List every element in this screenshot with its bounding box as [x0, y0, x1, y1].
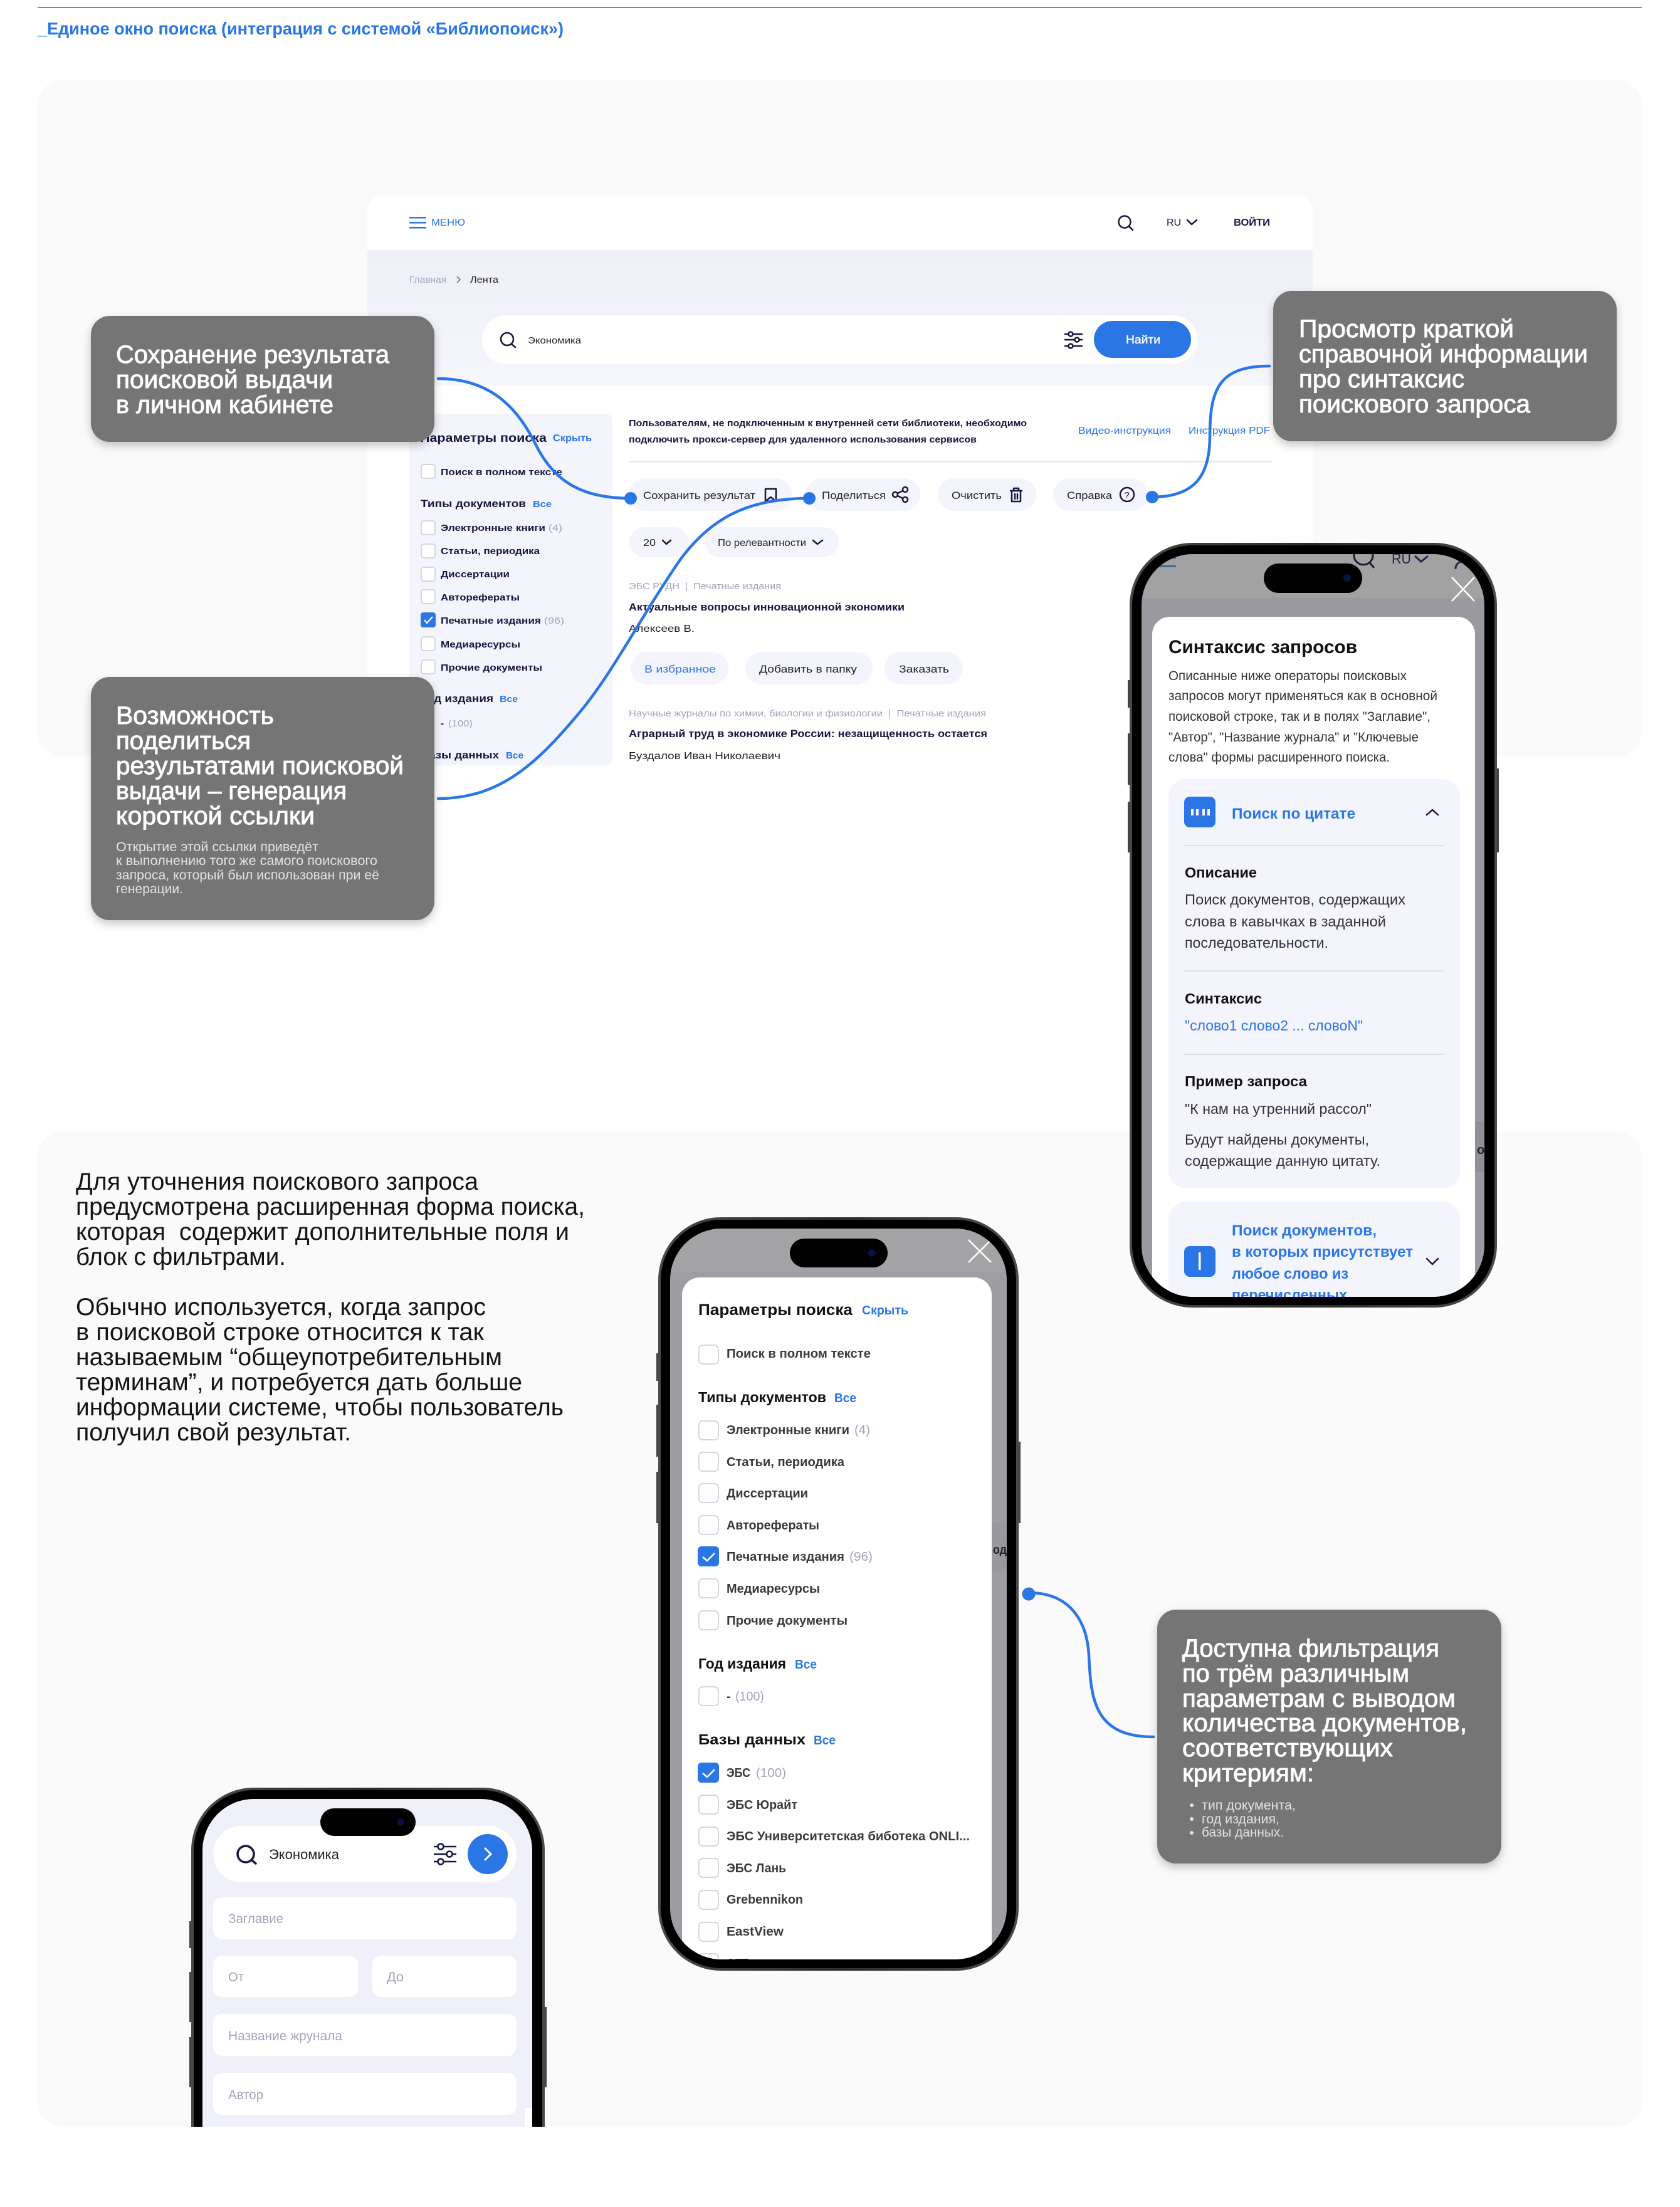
document types: Медиаресурсы [727, 1582, 820, 1596]
callout: share: результатами поисковой [116, 752, 404, 780]
sidebar heading: Параметры поиска [420, 432, 547, 445]
button: share [806, 478, 920, 511]
callout: syntax help: Просмотр краткой [1299, 315, 1514, 343]
example: Пример запроса [1185, 1073, 1307, 1089]
language selector: RU [1167, 218, 1181, 228]
breadcrumbs: Лента [470, 275, 499, 285]
filter sidebar: Печатные издания [441, 616, 541, 626]
connector: save result [438, 379, 637, 505]
description: Описание [1185, 864, 1257, 881]
page background [367, 196, 1313, 771]
callout: share: выдачи – генерация [116, 777, 347, 805]
instruction links [1078, 426, 1270, 436]
phone: syntax help [1128, 543, 1499, 1327]
year: Все [500, 694, 518, 705]
query: Экономика [528, 335, 582, 346]
card heading: Поиск по цитате [1232, 805, 1355, 822]
callout: save result: в личном кабинете [116, 391, 333, 419]
instruction links: Инструкция PDF [1189, 426, 1270, 436]
field: from: От [228, 1970, 244, 1984]
databases: Базы данных [421, 749, 500, 761]
search band [367, 250, 1313, 385]
breadcrumbs [409, 275, 499, 285]
left description text: в поисковой строке относится к так [76, 1319, 485, 1346]
example [1185, 1073, 1380, 1169]
callout: share: поделиться [116, 727, 251, 755]
button: save result: Сохранить результат [643, 490, 755, 501]
button: help [1053, 478, 1148, 511]
phone: filters [656, 1217, 1021, 1979]
notice text [629, 418, 1027, 445]
screen [202, 1799, 532, 2150]
document types: Типы документов [698, 1389, 826, 1405]
modal [682, 1277, 992, 1979]
icon: search [238, 1846, 256, 1864]
phone: extended search form [189, 1788, 547, 2207]
icon: close [1452, 577, 1474, 601]
filter sidebar: - [441, 718, 444, 729]
callout: syntax help: поискового запроса [1299, 391, 1531, 418]
year: - [727, 1690, 731, 1704]
instruction links: Видео-инструкция [1078, 426, 1171, 436]
left description text: блок с фильтрами. [76, 1244, 286, 1271]
callout: syntax help: справочной информации [1299, 340, 1588, 368]
callout: syntax help: про синтаксис [1299, 365, 1464, 393]
callout: filtering: количества документов, [1182, 1709, 1467, 1737]
notice text: Пользователям, не подключенным к внутренней сети библиотеки, необходимо [629, 418, 1027, 429]
dropdown: page size: 20 [643, 538, 656, 548]
panel: extended search [38, 1131, 1642, 2127]
left description text [76, 1168, 585, 1446]
criteria list [1190, 1798, 1296, 1840]
find button [1094, 321, 1191, 358]
search box [482, 315, 1197, 364]
callout: save result: Сохранение результата [116, 341, 390, 369]
desktop web page mockup [367, 196, 1313, 771]
icon: search [501, 333, 515, 347]
field: title [213, 1897, 517, 1939]
icon: header search [1118, 216, 1133, 230]
search result 1: Актуальные вопросы инновационной экономики [629, 602, 905, 613]
filter sidebar: Авторефераты [441, 592, 520, 603]
go button [468, 1834, 508, 1874]
databases: (100) [756, 1766, 786, 1780]
modal intro: Описанные ниже операторы поисковых [1168, 669, 1407, 683]
card: any word search [1168, 1202, 1460, 1297]
year: Все [795, 1658, 817, 1672]
icon: filter [434, 1844, 456, 1864]
field: from [213, 1956, 358, 1997]
connector: share [438, 492, 816, 799]
filter sidebar: Электронные книги [441, 523, 545, 533]
callout: share: Возможность [116, 702, 274, 730]
document types: (4) [854, 1423, 870, 1437]
top rule [38, 7, 1642, 8]
callout: save result: поисковой выдачи [116, 366, 333, 394]
connector: filters [1022, 1587, 1153, 1737]
dimmed header: RU [1392, 550, 1411, 567]
modal [1152, 617, 1475, 1327]
heading: Скрыть [862, 1304, 908, 1318]
description: слова в кавычках в заданной [1185, 913, 1386, 930]
dropdown: sorting [705, 527, 839, 557]
example: Будут найдены документы, [1185, 1131, 1369, 1148]
button: help: ? [1125, 490, 1130, 501]
frame [658, 1217, 1019, 1971]
databases: ЭБС Университетская биботека ONLI... [727, 1830, 970, 1843]
notice text: подключить прокси-сервер для удаленного использования сервисов [629, 434, 977, 445]
card: any word search: перечисленных [1232, 1287, 1348, 1304]
criteria list: тип документа, [1202, 1798, 1296, 1813]
search result 2 [629, 708, 987, 762]
criteria list: год издания, [1202, 1812, 1279, 1827]
modal intro [1168, 669, 1437, 765]
card: any word search: в которых присутствует [1232, 1244, 1413, 1261]
filter sidebar: Диссертации [441, 569, 510, 580]
filter sidebar: Медиаресурсы [441, 639, 520, 650]
left description text: получил свой результат. [76, 1419, 351, 1446]
modal intro: слова" формы расширенного поиска. [1168, 750, 1390, 765]
search pill [213, 1826, 517, 1882]
query: Экономика [269, 1847, 340, 1862]
syntax [1185, 993, 1363, 1030]
syntax: Синтаксис [1185, 990, 1262, 1007]
dropdown: sorting: По релевантности [718, 538, 806, 548]
search result 1: В избранное [644, 664, 716, 675]
callout: filtering [1157, 1610, 1501, 1864]
search result 2: Научные журналы по химии, биологии и физиологии | Печатные издания [629, 708, 986, 719]
button: help: Справка [1067, 490, 1113, 501]
dynamic island [320, 1808, 416, 1836]
search result 2: Аграрный труд в экономике России: незащищенность остается [629, 728, 987, 740]
screen [1142, 546, 1484, 1327]
databases: Все [814, 1734, 836, 1748]
title: _Единое окно поиска (интеграция с системой «Библиопоиск») [37, 19, 564, 38]
description: Поиск документов, содержащих [1185, 891, 1406, 908]
side buttons [656, 1353, 1021, 1523]
callout: share: генерации. [116, 882, 183, 896]
card: any word search: Поиск документов, [1232, 1222, 1377, 1239]
connector: help [1146, 366, 1269, 503]
document types: Все [834, 1392, 856, 1405]
databases: ЭБС [727, 1766, 750, 1780]
find label: Найти [1126, 333, 1160, 346]
left description text: называемым “общеупотребительным [76, 1344, 502, 1371]
filter sidebar: (4) [549, 523, 562, 533]
sidebar heading: Скрыть [553, 433, 592, 444]
frame [1130, 543, 1497, 1308]
callout: syntax help [1273, 291, 1617, 441]
filter sidebar: (100) [448, 718, 473, 729]
search result 1: Заказать [899, 664, 949, 675]
field: to: До [387, 1970, 404, 1984]
left description text: Для уточнения поискового запроса [76, 1168, 478, 1195]
left description text: Обычно используется, когда запрос [76, 1294, 486, 1321]
icon: separator [1184, 1246, 1215, 1277]
icon: close [969, 1240, 991, 1262]
year [698, 1655, 817, 1706]
behind text: о [1477, 1143, 1484, 1157]
callout: filtering: Доступна фильтрация [1182, 1635, 1439, 1662]
field: author: Автор [228, 2088, 263, 2102]
callout: share: к выполнению того же самого поискового [116, 854, 377, 868]
field: title: Заглавие [228, 1912, 283, 1926]
language selector [1167, 218, 1197, 228]
databases: ЭБС Юрайт [727, 1798, 797, 1812]
modal intro: "Автор", "Название журнала" и "Ключевые [1168, 730, 1419, 745]
screen [670, 1229, 1007, 1979]
icon: filter [1065, 332, 1082, 349]
callout: share [91, 677, 434, 920]
callout: share: запроса, который был использован при её [116, 868, 379, 883]
breadcrumbs: Главная [409, 275, 446, 285]
callout: filtering: по трём различным [1182, 1660, 1409, 1687]
databases: ЭБС Лань [727, 1862, 786, 1875]
field: journal [213, 2014, 517, 2056]
document types: Электронные книги [727, 1423, 849, 1437]
filter sidebar: Статьи, периодика [441, 546, 540, 557]
icon: chevron up [1427, 810, 1438, 815]
databases [421, 749, 523, 761]
login: ВОЙТИ [1234, 216, 1270, 228]
callout: share: Открытие этой ссылки приведёт [116, 840, 318, 854]
document types: Прочие документы [727, 1614, 848, 1628]
databases: ОТТ [727, 1957, 748, 1971]
document types: (96) [849, 1550, 873, 1564]
description [1185, 864, 1406, 951]
dynamic island [1264, 564, 1362, 593]
syntax: "слово1 слово2 ... словоN" [1185, 1017, 1363, 1034]
dropdown: page size [629, 527, 688, 557]
left description text: информации системе, чтобы пользователь [76, 1394, 564, 1421]
description: последовательности. [1185, 935, 1328, 951]
button: clear [938, 478, 1036, 511]
callout: filtering: критериям: [1182, 1759, 1314, 1787]
icon: chevron down [1427, 1259, 1438, 1264]
field: to [372, 1956, 517, 1997]
left description text: терминам”, и потребуется дать больше [76, 1369, 522, 1396]
icon: menu [409, 217, 426, 228]
full text option [699, 1345, 871, 1364]
icon: quotes [1184, 797, 1215, 827]
databases: Grebennikon [727, 1893, 803, 1907]
document types [698, 1389, 873, 1630]
filter sidebar [409, 414, 612, 765]
document types: Диссертации [727, 1487, 808, 1501]
callout: share: короткой ссылки [116, 802, 315, 830]
databases: EastView [727, 1925, 784, 1939]
card: any word search: любое слово из [1232, 1266, 1348, 1282]
document types: Все [533, 499, 552, 510]
year [421, 693, 518, 705]
side buttons [1128, 680, 1499, 852]
sidebar heading [420, 432, 592, 445]
example: "К нам на утренний рассол" [1185, 1101, 1372, 1117]
filter sidebar: Прочие документы [441, 663, 542, 673]
search result 1 [629, 581, 963, 684]
search result 2: Буздалов Иван Николаевич [629, 751, 780, 762]
modal intro: запросов могут применяться как в основной [1168, 689, 1437, 703]
left description text: предусмотрена расширенная форма поиска, [76, 1193, 585, 1220]
modal intro: поисковой строке, так и в полях "Заглавие", [1168, 710, 1431, 724]
callout: save result [91, 316, 434, 442]
search result 1: ЭБС РУДН | Печатные издания [629, 581, 781, 592]
year: (100) [735, 1690, 764, 1704]
filter sidebar: (96) [544, 616, 564, 626]
callout: filtering: параметрам с выводом [1182, 1685, 1456, 1712]
filter sidebar: Поиск в полном тексте [441, 467, 562, 478]
frame [191, 1788, 545, 2207]
year: Год издания [421, 693, 493, 705]
dimmed header [1159, 554, 1462, 569]
button: share: Поделиться [822, 490, 886, 501]
full text option: Поиск в полном тексте [727, 1347, 871, 1361]
field: journal: Название жрунала [228, 2029, 342, 2043]
document types: Статьи, периодика [727, 1455, 845, 1469]
search result 1: Добавить в папку [759, 664, 858, 675]
databases: Все [506, 750, 523, 761]
criteria list: базы данных. [1202, 1825, 1284, 1840]
panel: desktop search results [38, 80, 1642, 757]
button: clear: Очистить [952, 490, 1002, 501]
menu label: МЕНЮ [431, 218, 465, 228]
modal heading: Синтаксис запросов [1168, 637, 1357, 658]
dynamic island [790, 1239, 888, 1267]
document types: Авторефераты [727, 1519, 819, 1533]
databases: Базы данных [698, 1731, 806, 1748]
callout: filtering: соответствующих [1182, 1734, 1393, 1762]
document types: Типы документов [421, 498, 526, 510]
example: содержащие данную цитату. [1185, 1153, 1380, 1169]
behind text: од [993, 1543, 1007, 1557]
document types: Печатные издания [727, 1550, 844, 1564]
search result 1: Алексеев В. [629, 624, 695, 634]
left description text: которая содержит дополнительные поля и [76, 1219, 569, 1245]
card: quote search [1168, 779, 1460, 1188]
button: save result [629, 478, 792, 511]
field: author [213, 2073, 517, 2115]
heading: Параметры поиска [698, 1301, 853, 1319]
databases [698, 1731, 970, 1973]
year: Год издания [698, 1655, 786, 1672]
side buttons [189, 1921, 547, 2087]
